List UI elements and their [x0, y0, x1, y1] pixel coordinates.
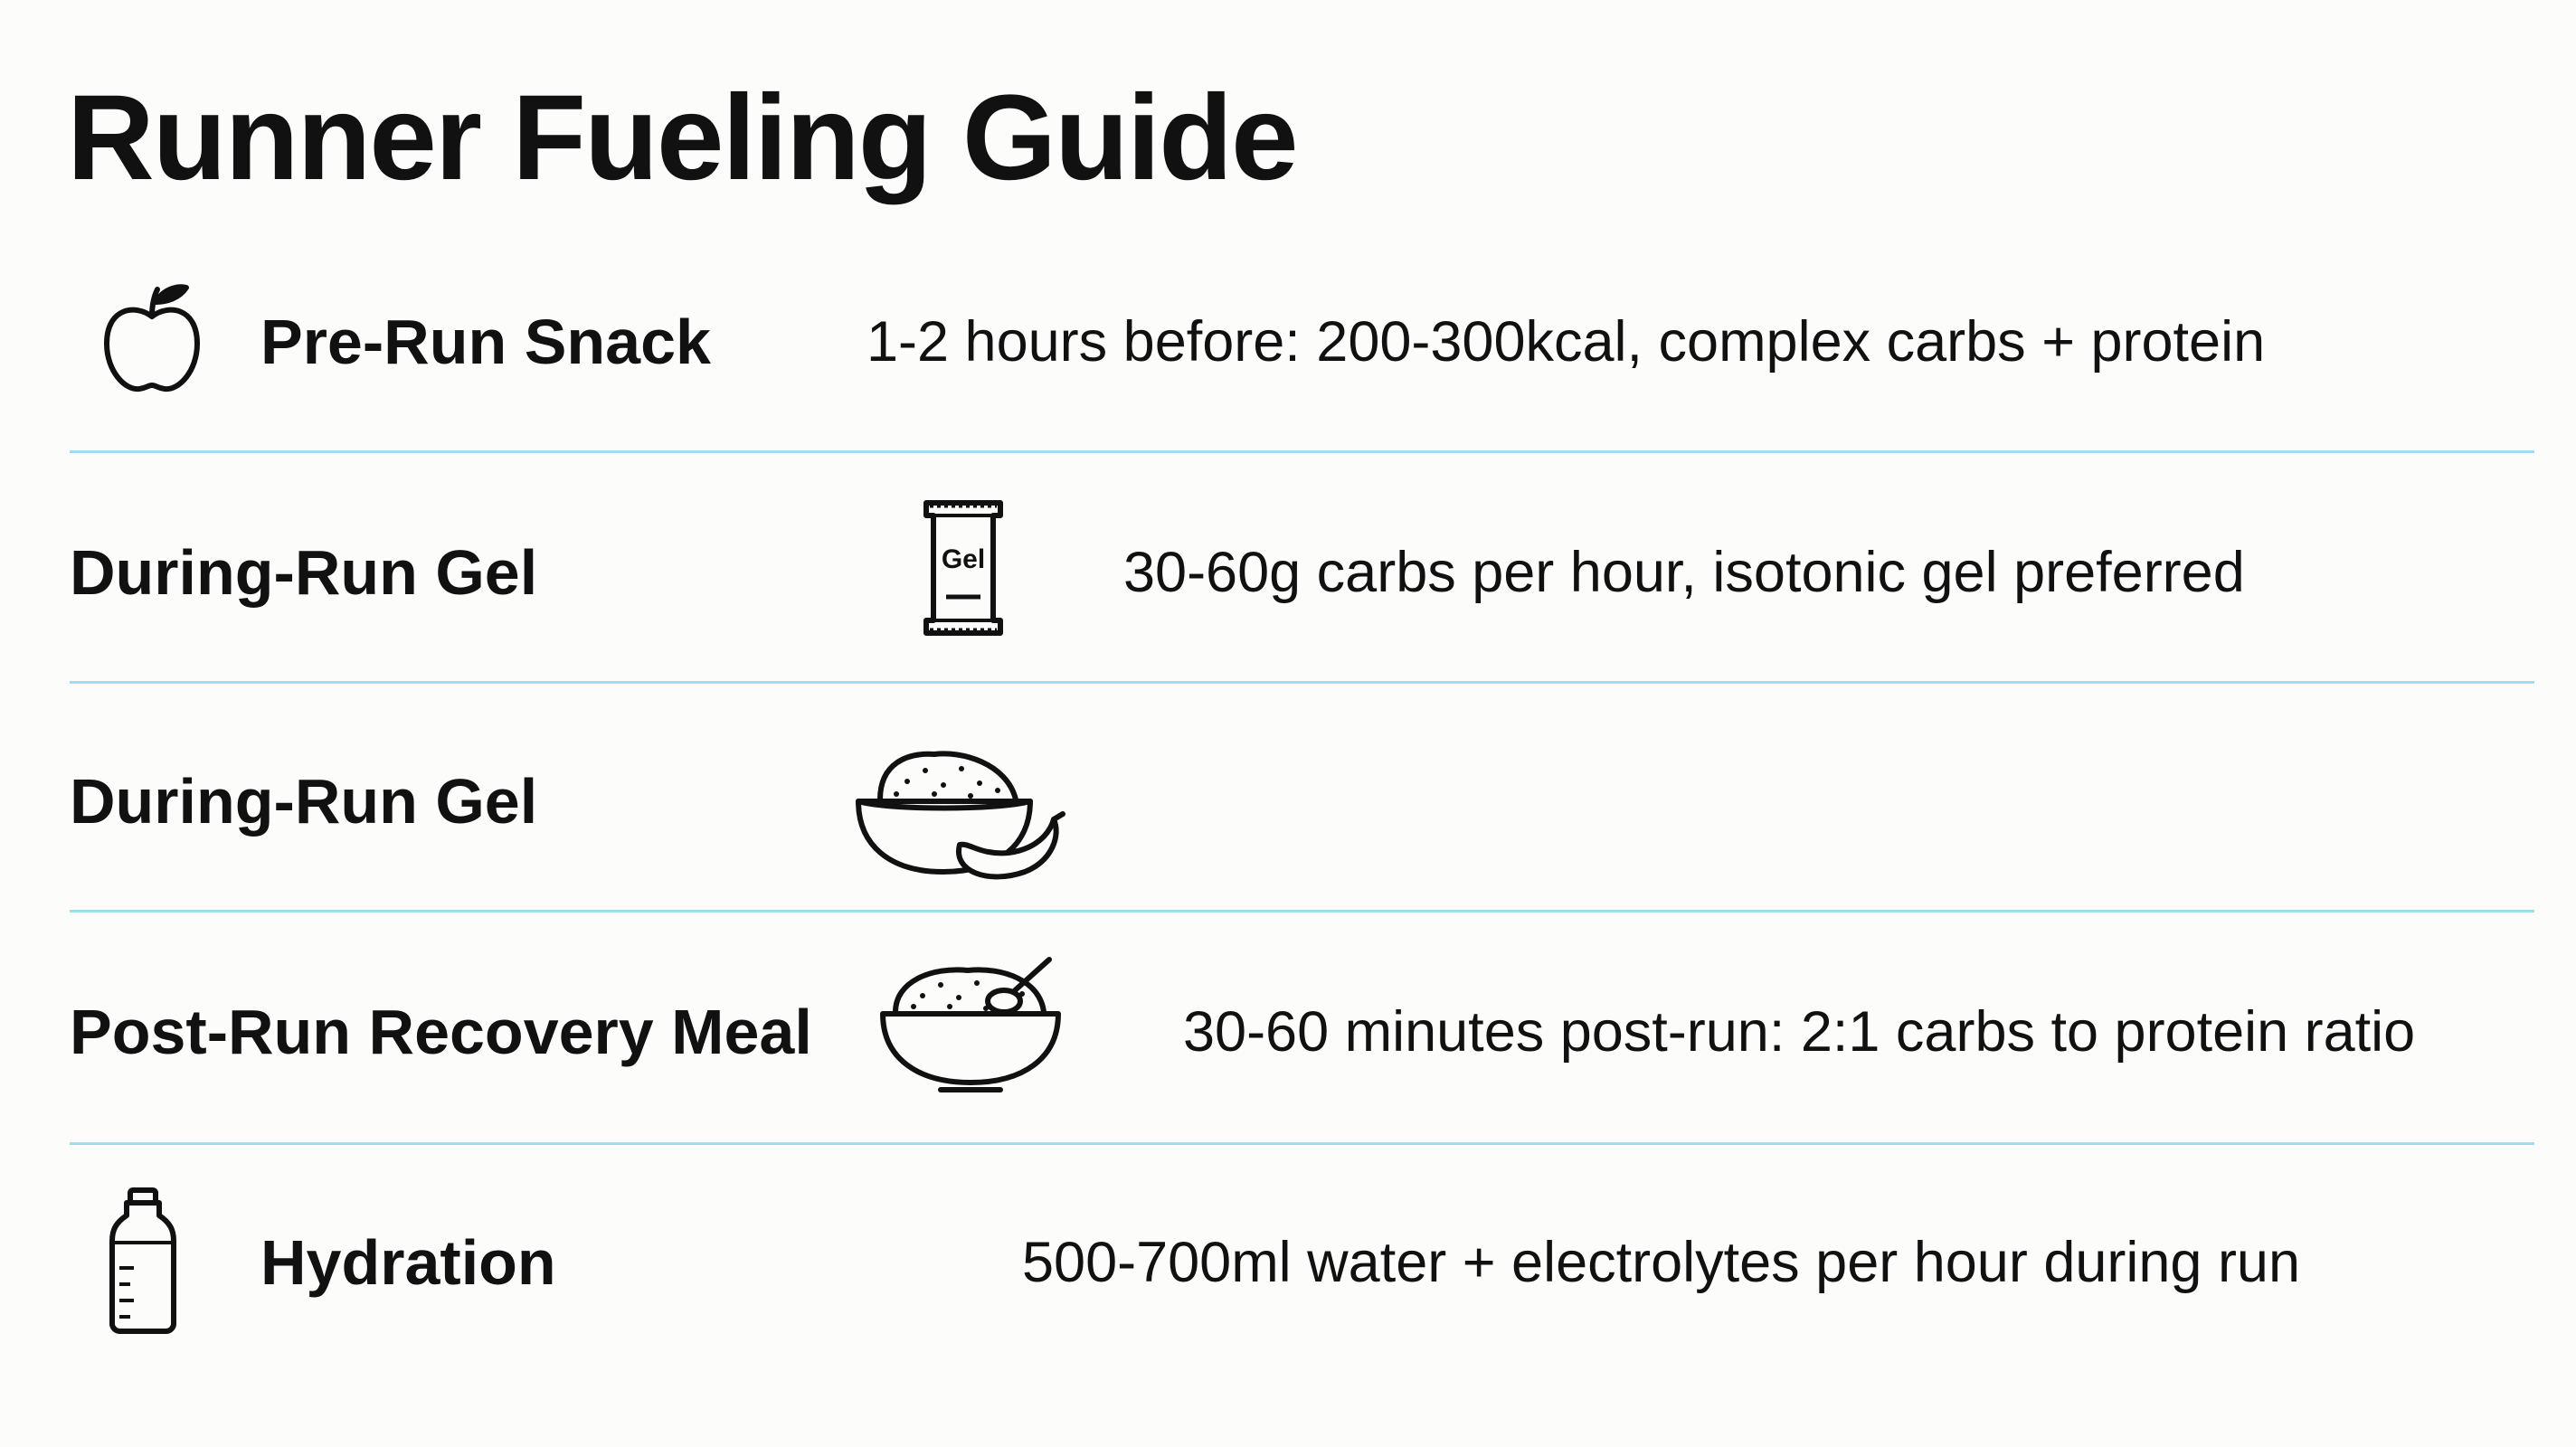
label: Post-Run Recovery Meal [70, 997, 812, 1067]
icon: gel packet [923, 500, 1003, 636]
description: 500-700ml water + electrolytes per hour during run [1022, 1231, 2300, 1294]
row: during-run gel [70, 500, 2245, 636]
title: Runner Fueling Guide [67, 71, 1297, 205]
row: during-run gel (bowl) [70, 751, 1065, 879]
icon: apple [104, 284, 200, 392]
row: pre-run snack [104, 284, 2265, 392]
label: Pre-Run Snack [260, 307, 711, 377]
description: 30-60g carbs per hour, isotonic gel preferred [1123, 541, 2245, 604]
icon: gel packet: Gel [942, 544, 985, 574]
row: hydration [109, 1187, 2300, 1334]
icon: rice bowl with banana [856, 751, 1065, 879]
icon: water bottle [109, 1187, 176, 1334]
row: post-run recovery meal [70, 957, 2415, 1092]
label: During-Run Gel [70, 766, 537, 837]
icon: bowl with spoon [880, 957, 1061, 1092]
description: 30-60 minutes post-run: 2:1 carbs to protein ratio [1183, 1000, 2415, 1064]
label: Hydration [260, 1227, 556, 1298]
label: During-Run Gel [70, 537, 537, 608]
description: 1-2 hours before: 200-300kcal, complex carbs + protein [867, 310, 2265, 374]
